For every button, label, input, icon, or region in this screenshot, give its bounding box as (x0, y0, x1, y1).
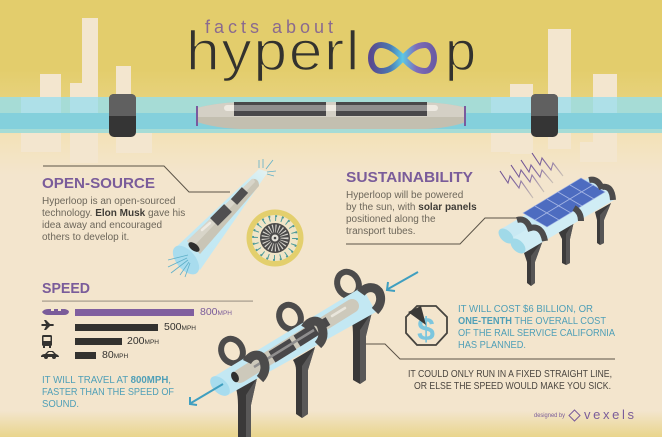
front rings (247, 288, 381, 379)
illustration: main tube with pylons (207, 268, 381, 437)
text block: speed fact: SOUND. (42, 399, 79, 410)
bar: 200mph (75, 335, 159, 347)
illustration: solar tubes (496, 177, 614, 286)
icon: plane (41, 320, 54, 330)
credit: designed by vexels: designed by (534, 413, 565, 419)
icon: pod (42, 309, 69, 315)
title: facts about: facts about (205, 17, 333, 37)
legs (523, 203, 611, 286)
transport tube (0, 97, 662, 133)
pylons (236, 312, 372, 437)
back rings (217, 268, 363, 367)
arrow: lower (190, 384, 223, 405)
leader line (346, 218, 518, 244)
leader line (366, 344, 615, 359)
glass tube (215, 287, 376, 395)
rings (517, 180, 613, 241)
heading: speed: SPEED (42, 280, 90, 297)
text block: cost: ONE-TENTH THE OVERALL COST (458, 316, 606, 327)
text block: straight line: IT COULD ONLY RUN IN A FIXED STRAIGHT LINE, (408, 369, 612, 380)
text block: cost: IT WILL COST $6 BILLION, OR (458, 304, 593, 315)
arrow: upper (387, 272, 418, 291)
icon: sun rays (500, 153, 563, 198)
bar: 80mph: 80MPH (102, 349, 128, 361)
icon: cost octagon (406, 306, 447, 347)
heading: open-source: OPEN-SOURCE (42, 175, 155, 192)
panel: speed (41, 280, 253, 410)
tube ring: left (109, 94, 136, 137)
panel: sustainability (346, 169, 518, 244)
tube ring: right (531, 94, 558, 137)
pod (196, 102, 466, 129)
solar panel (523, 178, 605, 227)
title: p: p (445, 19, 476, 82)
bar: 800mph: 800MPH (200, 306, 232, 318)
text block: cost: OF THE RAIL SERVICE CALIFORNIA (458, 328, 615, 339)
skyline (21, 18, 617, 163)
text block: speed fact (42, 375, 174, 410)
icon: cost octagon: $ (417, 311, 435, 347)
tubes (501, 177, 601, 242)
bar: 80mph (75, 349, 128, 361)
credit: designed by vexels: vexels (584, 407, 634, 422)
bar: 800mph (75, 306, 232, 318)
text block: straight line (408, 369, 612, 392)
title: hyperl: hyperl (186, 19, 361, 82)
icon: infinity loop (371, 45, 434, 71)
bar: 200mph: 200MPH (127, 335, 159, 347)
icon: bus (42, 335, 52, 348)
text block: straight line: OR ELSE THE SPEED WOULD MAKE YOU SICK. (414, 381, 611, 392)
icon: car (41, 351, 59, 359)
text block: open-source: Hyperloop is an open-sourced (42, 196, 175, 207)
text block: sustainability: transport tubes. (346, 226, 415, 237)
leader line (43, 166, 230, 192)
pod inside tube (230, 306, 352, 383)
text block: speed fact: IT WILL TRAVEL AT 800MPH, (42, 375, 171, 386)
text block: sustainability: positioned along the (346, 214, 436, 225)
bar: 500mph (75, 321, 196, 333)
illustration: diagonal tube (168, 159, 276, 279)
text block: cost (458, 304, 615, 351)
text block: sustainability: by the sun, with solar panels (346, 202, 477, 213)
heading: sustainability: SUSTAINABILITY (346, 169, 473, 186)
credit: designed by vexels (534, 407, 634, 422)
text block: sustainability: Hyperloop will be powered (346, 190, 463, 201)
panel: open-source (42, 166, 230, 243)
bar: 500mph: 500MPH (164, 321, 196, 333)
text block: open-source: technology. Elon Musk gave his (42, 208, 185, 219)
text block: speed fact: FASTER THAN THE SPEED OF (42, 387, 174, 398)
text block: cost: HAS PLANNED. (458, 340, 526, 351)
icon: turbine fan (246, 210, 304, 266)
text block: open-source: idea away and encouraged (42, 220, 162, 231)
text block: open-source: others to develop it. (42, 232, 129, 243)
